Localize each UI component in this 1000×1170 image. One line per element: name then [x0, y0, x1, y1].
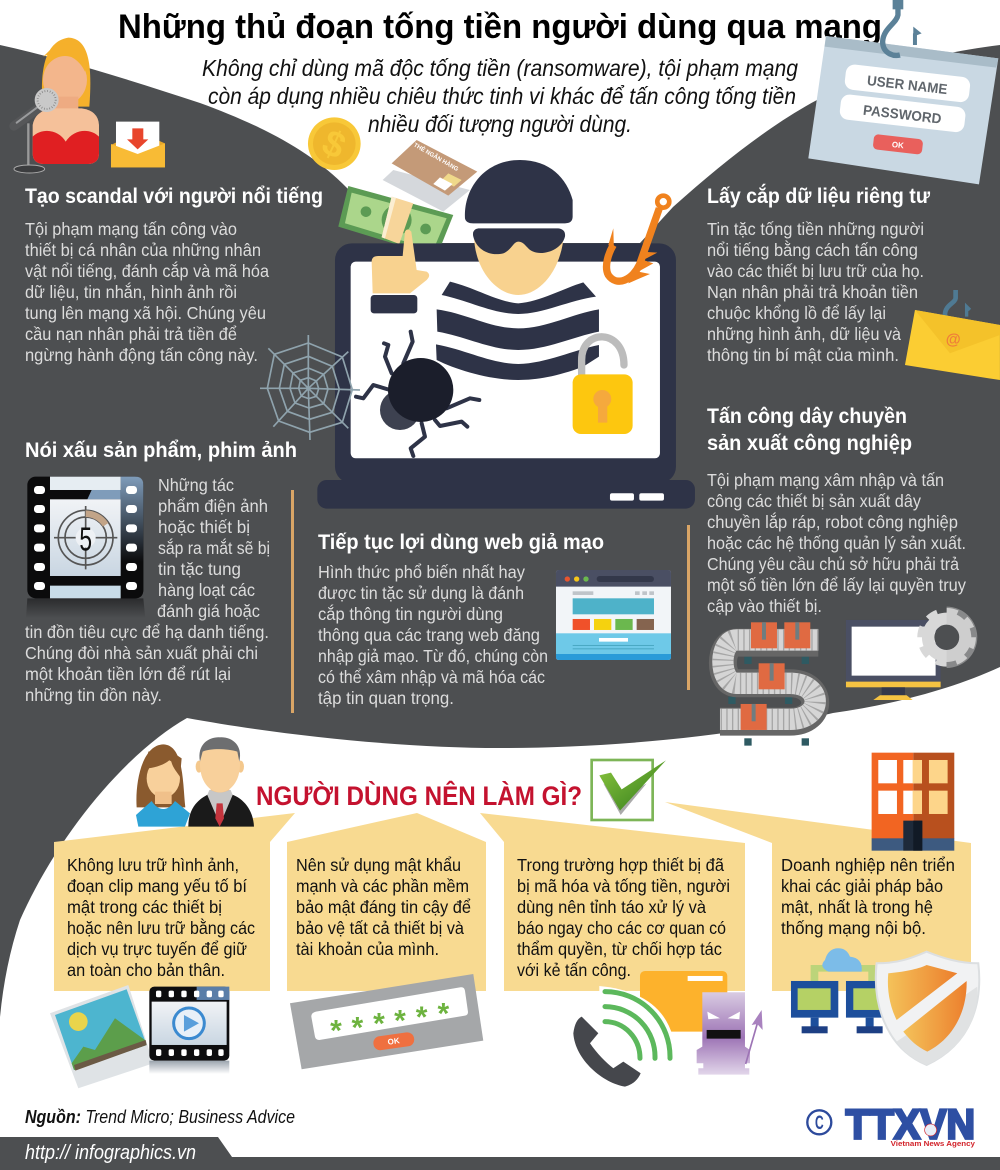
- icon: film countdown: 5: [79, 522, 92, 559]
- body text: tin tặc tung: [158, 559, 241, 579]
- body text: tung lên mạng xã hội. Chúng yêu: [25, 303, 266, 323]
- subtitle: Không chỉ dùng mã độc tống tiền (ransomware), tội phạm mạng: [202, 55, 798, 81]
- body text: cắp thông tin người dùng: [318, 603, 503, 624]
- hacker figure: [436, 160, 599, 380]
- icon: password panel: *: [351, 1011, 363, 1044]
- advice box 3: thẩm quyền, từ chối hợp tác: [517, 939, 722, 959]
- body text: Hình thức phổ biến nhất hay: [318, 562, 525, 582]
- panel: industrial production lines: [707, 405, 966, 616]
- icon: password panel: *: [394, 1004, 406, 1037]
- website url: http:// infographics.vn: [25, 1142, 196, 1164]
- body text: Chúng yêu cầu chủ sở hữu phải trả: [707, 554, 959, 574]
- advice box 3: bị mã hóa và tống tiền, người: [517, 876, 730, 896]
- body text: những tin đồn này.: [25, 685, 162, 705]
- icon: password panel: *: [373, 1008, 385, 1041]
- body text: thiết bị cá nhân của những nhân: [25, 240, 261, 260]
- advice box 2: Nên sử dụng mật khẩu: [296, 855, 461, 875]
- advice box 1: an toàn cho bản thân.: [67, 960, 225, 980]
- advice box 4: thống mạng nội bộ.: [781, 918, 926, 938]
- advice box 4: mật, nhất là trong hệ: [781, 897, 933, 917]
- advice box 4: [665, 802, 971, 991]
- body text: [25, 475, 270, 705]
- icon: monitor with gear: [846, 607, 977, 700]
- icon: folder and malware monster: [640, 971, 763, 1075]
- icon: web page mockup: [556, 570, 671, 660]
- body text: đánh giá hoặc: [157, 601, 260, 621]
- body text: [318, 562, 548, 708]
- icon: login form on hook: PASSWORD: [862, 102, 942, 127]
- icon: office building: [872, 753, 954, 851]
- padlock: [573, 337, 633, 434]
- body text: hoặc thiết bị: [158, 517, 250, 537]
- body text: tập tin quan trọng.: [318, 688, 454, 708]
- body text: chuộc khổng lồ để lấy lại: [707, 303, 886, 323]
- icon: security shield: [876, 952, 979, 1065]
- fish hook: [607, 196, 669, 283]
- icon: password panel: OK: [387, 1036, 400, 1047]
- icon: bank cards: [383, 140, 477, 212]
- icon: telephone with signal arcs: [573, 986, 676, 1087]
- body text: vào các thiết bị lưu trữ của họ.: [707, 261, 924, 281]
- advice box 2: tài khoản của mình.: [296, 939, 439, 959]
- body text: cầu nạn nhân phải trả tiền để: [25, 324, 237, 344]
- advice box 3: Trong trường hợp thiết bị đã: [517, 855, 724, 875]
- body text: công các thiết bị sản xuất dây: [707, 491, 921, 511]
- advice box 2: bảo vệ tất cả thiết bị và: [296, 918, 464, 938]
- icon: bank cards: THẺ NGÂN HÀNG: [412, 142, 460, 173]
- heading: Nói xấu sản phẩm, phim ảnh: [25, 439, 297, 462]
- advice box 2: bảo mật đáng tin cậy để: [296, 897, 471, 917]
- icon: gold coin: $: [316, 121, 352, 167]
- body text: tin đồn tiêu cực để hạ danh tiếng.: [25, 622, 269, 642]
- heading: sản xuất công nghiệp: [707, 432, 912, 455]
- icon: conveyor belt: [720, 622, 818, 746]
- icon: phishing envelope: [905, 290, 1000, 380]
- icon: green check box: [592, 760, 666, 820]
- icon: photo and video: [50, 985, 229, 1088]
- body text: ngừng hành động tấn công này.: [25, 345, 258, 365]
- body text: Tin tặc tống tiền những người: [707, 219, 924, 239]
- subtitle: còn áp dụng nhiều chiêu thức tinh vi khác để tấn công tống tiền: [208, 83, 796, 109]
- advice box 3: [480, 813, 745, 991]
- advice box 2: [287, 813, 486, 991]
- icon: password panel: [290, 974, 483, 1069]
- body text: những hình ảnh, dữ liệu và: [707, 324, 901, 344]
- icon: film countdown: [26, 477, 145, 618]
- body text: Tội phạm mạng xâm nhập và tấn: [707, 470, 944, 490]
- advice box 4: Doanh nghiệp nên triển: [781, 855, 955, 875]
- body text: Những tác: [158, 475, 234, 495]
- hand and cuff: [371, 229, 429, 313]
- heading: Tạo scandal với người nổi tiếng: [25, 185, 323, 208]
- footer bar: [0, 1137, 1000, 1170]
- icon: login form on hook: OK: [891, 140, 905, 150]
- advice box 4: khai các giải pháp bảo: [781, 876, 943, 896]
- illustration: hacker on laptop: [317, 160, 695, 509]
- panel: fake websites: [318, 531, 671, 708]
- body text: phẩm điện ảnh: [158, 496, 268, 516]
- body text: hoặc các hệ thống quản lý sản xuất.: [707, 533, 966, 553]
- subtitle: [202, 55, 798, 137]
- body text: nhập giả mạo. Từ đó, chúng còn: [318, 646, 548, 666]
- icon: password panel: *: [437, 997, 449, 1030]
- icon: login form on hook: [808, 0, 998, 184]
- icon: gold coin: [308, 117, 361, 170]
- logo: TTXVN: TTXVN: [846, 1102, 975, 1148]
- advice box 3: với kẻ tấn công.: [517, 960, 631, 980]
- body text: vật nổi tiếng, đánh cắp và mã hóa: [25, 260, 269, 281]
- icon: computer network: [791, 948, 893, 1033]
- body text: Nạn nhân phải trả khoản tiền: [707, 282, 918, 302]
- icon: banknote: [338, 186, 453, 257]
- body text: thông tin bí mật của mình.: [707, 345, 899, 365]
- body text: thông qua các trang web đăng: [318, 625, 540, 645]
- heading: Tiếp tục lợi dùng web giả mạo: [318, 531, 604, 554]
- body text: chuyền lắp ráp, robot công nghiệp: [707, 511, 958, 532]
- body text: Tội phạm mạng tấn công vào: [25, 219, 237, 239]
- body text: [707, 470, 966, 616]
- icon: spider web: [260, 335, 360, 440]
- body text: hàng loạt các: [158, 580, 255, 600]
- body text: [25, 219, 269, 365]
- advice box 1: mật trong các thiết bị: [67, 897, 222, 917]
- advice box 1: dịch vụ trực tuyến để giữ: [67, 939, 247, 959]
- body text: Chúng đòi nhà sản xuất phải chi: [25, 643, 258, 663]
- advice box 1: [54, 813, 295, 991]
- body text: nổi tiếng bằng cách tấn công: [707, 239, 918, 260]
- icon: envelope with download arrow: [111, 122, 165, 167]
- logo: TTXVN: C: [815, 1113, 824, 1134]
- icon: password panel: *: [416, 1001, 428, 1034]
- panel: private data theft: [707, 184, 931, 365]
- laptop: [317, 243, 695, 509]
- heading: Lấy cắp dữ liệu riêng tư: [707, 184, 931, 208]
- title: Những thủ đoạn tống tiền người dùng qua mạng: [118, 8, 882, 46]
- advice box 3: báo ngay cho các cơ quan có: [517, 918, 726, 938]
- panel: product and film defamation: [25, 439, 297, 705]
- body text: có thể xâm nhập và mã hóa các: [318, 667, 545, 687]
- panel: celebrity scandal: [25, 185, 323, 365]
- body text: cập vào thiết bị.: [707, 596, 822, 616]
- source line: Nguồn: Trend Micro; Business Advice: [25, 1107, 295, 1127]
- heading: Tấn công dây chuyền: [707, 405, 907, 428]
- body text: sắp ra mắt sẽ bị: [158, 537, 270, 558]
- computer bug: [356, 332, 479, 456]
- body text: một khoản tiền lớn để rút lại: [25, 664, 231, 684]
- icon: password panel: *: [330, 1015, 342, 1048]
- body text: [707, 219, 924, 365]
- icon: user couple: [136, 737, 254, 827]
- advice box 3: dùng nên tỉnh táo xử lý và: [517, 897, 706, 917]
- icon: login form on hook: USER NAME: [866, 72, 948, 97]
- section heading: NGƯỜI DÙNG NÊN LÀM GÌ?: [256, 780, 582, 811]
- body text: một số tiền lớn để lấy lại quyền truy: [707, 575, 966, 595]
- body text: dữ liệu, tin nhắn, hình ảnh rồi: [25, 281, 237, 302]
- heading: [707, 405, 912, 455]
- body text: được tin tặc sử dụng là đánh: [318, 583, 524, 603]
- advice box 1: Không lưu trữ hình ảnh,: [67, 855, 239, 875]
- advice box 1: đoạn clip mang yếu tố bí: [67, 876, 247, 896]
- icon: singer with microphone: [14, 38, 99, 173]
- icon: phishing envelope: @: [946, 332, 961, 349]
- advice box 1: hoặc nên lưu trữ bằng các: [67, 917, 255, 938]
- logo: TTXVN: Vietnam News Agency: [891, 1139, 976, 1148]
- section: what users should do: [50, 737, 979, 1088]
- subtitle: nhiều đối tượng người dùng.: [368, 111, 632, 137]
- advice box 2: mạnh và các phần mềm: [296, 876, 469, 896]
